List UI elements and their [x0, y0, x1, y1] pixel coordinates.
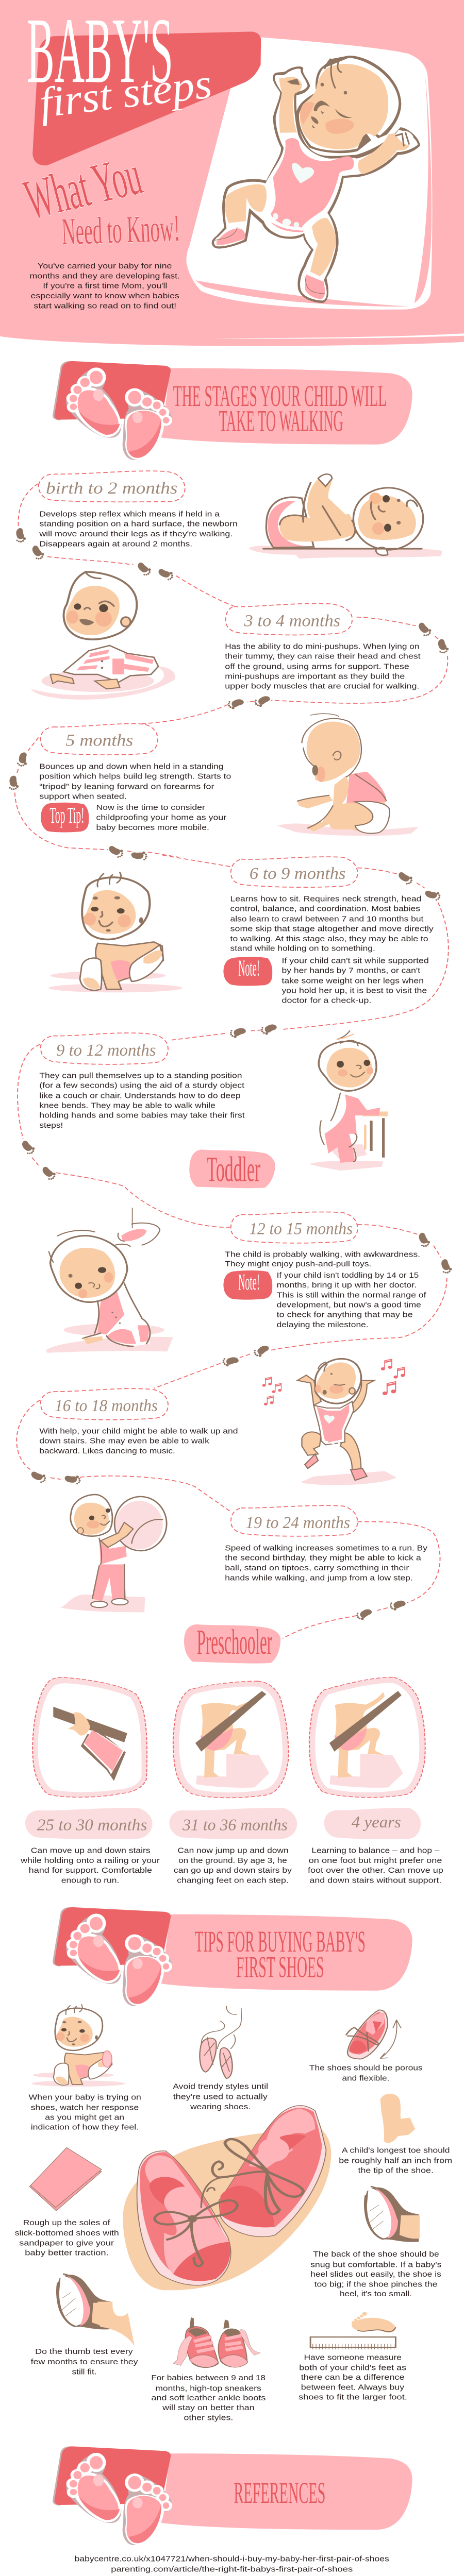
text: thumb test: still fit.: [72, 2367, 97, 2376]
text: 16 to 18 months: backward. Likes dancing to music.: [39, 1447, 175, 1455]
label: 31 to 36 months: [169, 1808, 297, 1839]
stage label: toddler: [189, 1149, 275, 1189]
text: 19 to 24 months: [225, 1544, 427, 1582]
icon: ballet shoes: [200, 2006, 241, 2078]
text: watch response: indication of how they feel.: [31, 2123, 139, 2131]
text: 16 to 18 months: With help, your child might be able to walk up and: [39, 1427, 238, 1435]
callout: note 6 to 9 months: Note!: [238, 955, 260, 981]
text: measure both feet: between feet. Always buy: [301, 2382, 404, 2392]
text: rough up: [15, 2218, 119, 2257]
text: 31 to 36 months: Can now jump up and down: [177, 1846, 289, 1855]
text: measure both feet: both of your child's feet as: [299, 2363, 406, 2372]
icon: sandpaper: [29, 2147, 102, 2211]
text: 3 to 4 months: their tummy, they can raise their head and chest: [225, 652, 421, 660]
text: 5 months: [39, 762, 231, 801]
text: watch response: [29, 2093, 141, 2131]
text: rough up: sandpaper to give your: [19, 2239, 114, 2247]
card: 31 to 36 months: [173, 1681, 289, 1798]
text: 9 to 12 months: steps!: [39, 1122, 63, 1130]
icon: baby carrying ball: [61, 1495, 167, 1612]
text: high-top sneakers: [151, 2373, 266, 2422]
label: 16 to 18 months: 16 to 18 months: [55, 1396, 158, 1415]
intro text: months and they are developing fast.: [29, 272, 180, 280]
text: 9 to 12 months: (for a few seconds) using the aid of a sturdy object: [39, 1081, 245, 1090]
reference links: [75, 2554, 389, 2573]
label: 4 years: [324, 1808, 421, 1839]
text: 25 to 30 months: [20, 1846, 160, 1885]
text: porous: and flexible.: [342, 2074, 389, 2082]
label: birth to 2 months: birth to 2 months: [46, 479, 177, 497]
intro text: start walking so read on to find out!: [34, 302, 176, 310]
text: rough up: slick-bottomed shoes with: [15, 2228, 119, 2237]
text: 9 to 12 months: knee bends. They may be able to walk while: [39, 1101, 216, 1110]
shoe tips: [15, 2005, 452, 2347]
text: measure both feet: shoes to fit the larger foot.: [299, 2393, 407, 2401]
text: thumb test: Do the thumb test every: [35, 2347, 133, 2356]
icon: baby on tummy: [31, 572, 175, 700]
callout: top tip: Top Tip!: [49, 803, 85, 828]
text: snug heel: too big; if the shoe pinches the: [314, 2280, 437, 2289]
text: 3 to 4 months: off the ground, using arms for support. These: [225, 663, 409, 671]
text: 19 to 24 months: Speed of walking increases sometimes to a run. By: [225, 1544, 427, 1552]
label: 31 to 36 months: 31 to 36 months: [182, 1816, 288, 1834]
text: 9 to 12 months: They can pull themselves up to a standing position: [39, 1072, 242, 1080]
stages block 3: Preschooler: [197, 1622, 272, 1662]
text: birth to 2 months: Disappears again at around 2 months.: [39, 540, 192, 548]
icon: baby sitting front: [48, 872, 183, 992]
text: 6 to 9 months: to walking. At this stage also, they may be able to: [230, 935, 428, 943]
icon: thumb test: [57, 2274, 135, 2347]
text: birth to 2 months: will move around their legs as if they're walking.: [39, 530, 233, 538]
text: 5 months: “tripod” by leaning forward on forearms for: [39, 783, 214, 791]
panel swoosh: [195, 74, 432, 307]
icon: flexible shoe: [346, 2010, 401, 2059]
text: porous: [309, 2063, 423, 2082]
callout: note 12 to 15 months: development, but now's a good time: [277, 1301, 421, 1309]
text: longest toe: [339, 2146, 452, 2175]
icon: music notes: [262, 1359, 405, 1405]
intro text: If you're a first time Mom, you'll: [43, 282, 167, 290]
lower tips and footer: [0, 2312, 464, 2576]
text: 31 to 36 months: changing feet on each step.: [177, 1876, 289, 1885]
section heading: stages: [53, 361, 412, 460]
text: 4 years: foot over the other. Can move up: [308, 1866, 443, 1875]
footprints banner: [53, 361, 412, 460]
header section: BABY'S: [27, 0, 173, 103]
left shoe: [137, 2151, 237, 2285]
icon: shoe heel check: [364, 2187, 420, 2242]
text: 12 to 15 months: The child is probably walking, with awkwardness.: [225, 1250, 420, 1259]
section heading: references: [53, 2446, 412, 2545]
icon: dancing baby: [262, 1359, 405, 1485]
text: 31 to 36 months: [174, 1846, 292, 1885]
subtitle: what you: What You: [19, 144, 147, 231]
text: trendy styles: Avoid trendy styles until: [173, 2082, 268, 2091]
title: first steps: first steps: [37, 60, 214, 127]
text: 5 months: support when seated.: [39, 792, 127, 801]
label: 25 to 30 months: 25 to 30 months: [37, 1816, 147, 1834]
text: watch response: shoes, watch her response: [31, 2103, 139, 2112]
text: longest toe: A child's longest toe should: [342, 2146, 450, 2155]
dashed trail with footprints: [18, 855, 449, 1258]
icon: baby lying: [248, 474, 442, 558]
text: snug heel: snug but comfortable. If a baby's: [310, 2260, 441, 2269]
text: 19 to 24 months: hands while walking, and jump from a low step.: [225, 1574, 413, 1582]
text: porous: The shoes should be porous: [309, 2063, 423, 2072]
callout: note 12 to 15 months: [223, 1269, 426, 1329]
stages block 2: [18, 855, 449, 1268]
callout: note 6 to 9 months: [223, 955, 429, 1005]
stage label: toddler: Toddler: [207, 1150, 260, 1189]
icon: sleeping baby: [212, 56, 420, 303]
text: thumb test: few months to ensure they: [31, 2357, 138, 2366]
text: 16 to 18 months: [39, 1427, 238, 1455]
text: 31 to 36 months: can go up and down stairs by: [174, 1866, 292, 1875]
text: longest toe: be roughly half an inch from: [339, 2156, 452, 2165]
label: 6 to 9 months: 6 to 9 months: [250, 864, 345, 883]
right shoe: [212, 2106, 326, 2237]
label: 19 to 24 months: 19 to 24 months: [245, 1513, 350, 1532]
text: 12 to 15 months: [225, 1250, 420, 1268]
icon: baby sitting side view: [277, 714, 419, 836]
text: birth to 2 months: standing position on a hard surface, the newborn: [39, 520, 238, 528]
callout: note 6 to 9 months: by her hands by 7 months, or can't: [281, 967, 421, 975]
red title shape: [32, 31, 261, 165]
icon: foot: [380, 2094, 415, 2143]
label: 3 to 4 months: 3 to 4 months: [244, 611, 340, 630]
dashed trail with footprints: [9, 471, 450, 861]
text: longest toe: the tip of the shoe.: [358, 2166, 434, 2175]
text: measure both feet: there can be a difference: [301, 2372, 405, 2382]
icon: baby standing at crib: [309, 1031, 388, 1171]
text: 25 to 30 months: enough to run.: [61, 1876, 119, 1885]
reference links: parenting.com/article/the-right-fit-babys-first-pair-of-shoes: [111, 2564, 353, 2573]
callout: note 6 to 9 months: you hold her up, it is best to visit the: [281, 987, 427, 995]
callout: note 12 to 15 months: to check for anything that may be: [277, 1311, 413, 1319]
text: 6 to 9 months: stand while holding on to something.: [230, 944, 375, 953]
text: 25 to 30 months: hand for support. Comfortable: [29, 1866, 152, 1875]
intro text: [29, 262, 180, 310]
text: 25 to 30 months: while holding onto a railing or your: [20, 1856, 160, 1865]
label: 25 to 30 months: [25, 1808, 153, 1839]
icon: baby with shoe: [31, 2005, 125, 2087]
text: 6 to 9 months: also learn to crawl between 7 and 10 months but: [230, 915, 424, 923]
text: high-top sneakers: will stay on better than: [162, 2403, 255, 2412]
text: birth to 2 months: [39, 510, 238, 548]
pink header background: [0, 0, 464, 346]
text: high-top sneakers: For babies between 9 and 18: [151, 2373, 266, 2382]
section heading: tips: [53, 1907, 412, 2006]
callout: note 12 to 15 months: This is still within the normal range of: [277, 1291, 426, 1299]
text: 6 to 9 months: control, balance, and coordination. Most babies: [230, 905, 420, 913]
intro text: You've carried your baby for nine: [38, 262, 172, 270]
text: 19 to 24 months: the second birthday, they might be able to kick a: [225, 1554, 421, 1562]
heading text: [195, 1925, 366, 1984]
callout: note 12 to 15 months: Note!: [238, 1269, 260, 1295]
illustration: big pair of shoes: [123, 2106, 331, 2290]
callout: top tip: [41, 803, 227, 832]
callout: note 6 to 9 months: take some weight on her legs when: [281, 977, 424, 985]
text: 4 years: Learning to balance – and hop –: [311, 1846, 439, 1855]
label: 9 to 12 months: 9 to 12 months: [56, 1041, 156, 1059]
dashed trail with footprints: [16, 1259, 453, 1638]
callout: top tip: baby becomes more mobile.: [96, 824, 209, 832]
header section: [0, 0, 464, 346]
text: 5 months: position which helps build leg strength. Starts to: [39, 772, 231, 781]
text: watch response: as you might get an: [45, 2112, 124, 2122]
icon: sneakers: [173, 2317, 260, 2367]
text: trendy styles: they're used to actually: [173, 2092, 268, 2101]
icon: baby crawling under toy: [46, 1208, 173, 1353]
text: 3 to 4 months: [225, 642, 421, 690]
text: high-top sneakers: other styles.: [184, 2413, 233, 2422]
text: 9 to 12 months: like a couch or chair. Understands how to do deep: [39, 1092, 241, 1100]
text: trendy styles: [173, 2082, 268, 2111]
text: thumb test: [31, 2347, 138, 2376]
label: 4 years: 4 years: [352, 1814, 401, 1832]
text: high-top sneakers: months, high-top sneakers: [155, 2384, 261, 2393]
card: 25 to 30 months: [32, 1677, 147, 1797]
text: 3 to 4 months: upper body muscles that are crucial for walking.: [225, 682, 419, 690]
icon: foot on ruler: [310, 2312, 395, 2347]
text: high-top sneakers: and soft leather ankle boots: [151, 2393, 266, 2402]
callout: note 12 to 15 months: If your child isn't toddling by 14 or 15: [277, 1272, 419, 1280]
text: 3 to 4 months: mini-pushups are important as they build the: [225, 672, 405, 681]
text: 4 years: and down stairs without support.: [309, 1876, 441, 1885]
text: rough up: Rough up the soles of: [23, 2218, 110, 2227]
card: 4 years: [309, 1677, 425, 1798]
text: snug heel: [310, 2249, 441, 2298]
intro text: especially want to know when babies: [31, 292, 179, 300]
text: 31 to 36 months: on the ground. By age 3, he: [178, 1856, 287, 1865]
text: 6 to 9 months: some skip that stage altogether and move directly: [230, 925, 434, 933]
header white slash: [210, 333, 464, 338]
preschooler cards: [20, 1677, 443, 1885]
callout: note 6 to 9 months: doctor for a check-up.: [281, 997, 371, 1005]
text: snug heel: heel, it's too small.: [340, 2289, 412, 2298]
reference links: babycentre.co.uk/x1047721/when-should-i-buy-my-baby-her-first-pair-of-shoes: [75, 2554, 389, 2563]
callout: note 12 to 15 months: months, bring it up with her doctor.: [277, 1281, 417, 1290]
header section: Need to Know!: [61, 207, 181, 253]
text: 9 to 12 months: holding hands and some babies may take their first: [39, 1111, 245, 1120]
text: 6 to 9 months: [230, 895, 434, 953]
text: measure both feet: Have someone measure: [304, 2353, 402, 2362]
text: watch response: When your baby is trying on: [29, 2093, 141, 2102]
text: 25 to 30 months: Can move up and down stairs: [31, 1846, 151, 1855]
stages block 3: [16, 1208, 453, 1664]
text: 9 to 12 months: [39, 1072, 245, 1130]
white panel: [186, 37, 432, 310]
label: 5 months: 5 months: [65, 731, 133, 750]
callout: top tip: Now is the time to consider: [96, 804, 206, 812]
text: measure both feet: [299, 2353, 407, 2401]
text: 4 years: [308, 1846, 443, 1885]
label: 12 to 15 months: 12 to 15 months: [249, 1219, 353, 1238]
callout: note 12 to 15 months: delaying the milestone.: [277, 1321, 369, 1329]
text: 5 months: Bounces up and down when held in a standing: [39, 762, 223, 771]
text: trendy styles: wearing shoes.: [190, 2102, 251, 2111]
footprints banner: [53, 1907, 412, 2006]
text: snug heel: heel slides out easily, the shoe is: [310, 2269, 441, 2279]
text: snug heel: The back of the shoe should be: [313, 2249, 439, 2258]
stages block 1: [9, 471, 450, 861]
text: 19 to 24 months: ball, stand on tiptoes, carry something in their: [225, 1564, 409, 1572]
text: 12 to 15 months: They might enjoy push-and-pull toys.: [225, 1260, 371, 1268]
text: birth to 2 months: Develops step reflex which means if held in a: [39, 510, 220, 518]
callout: top tip: childproofing your home as your: [96, 814, 227, 822]
stage label: preschooler: [184, 1622, 280, 1664]
text: 4 years: on one foot but might prefer one: [309, 1856, 442, 1865]
heading text: [173, 379, 387, 437]
text: rough up: baby better traction.: [25, 2248, 109, 2257]
text: 16 to 18 months: down stairs. She may even be able to walk: [39, 1437, 210, 1445]
callout: note 6 to 9 months: If your child can't sit while supported: [281, 957, 429, 965]
text: 3 to 4 months: Has the ability to do mini-pushups. When lying on: [225, 642, 419, 651]
text: 6 to 9 months: Learns how to sit. Requires neck strength, head: [230, 895, 421, 903]
